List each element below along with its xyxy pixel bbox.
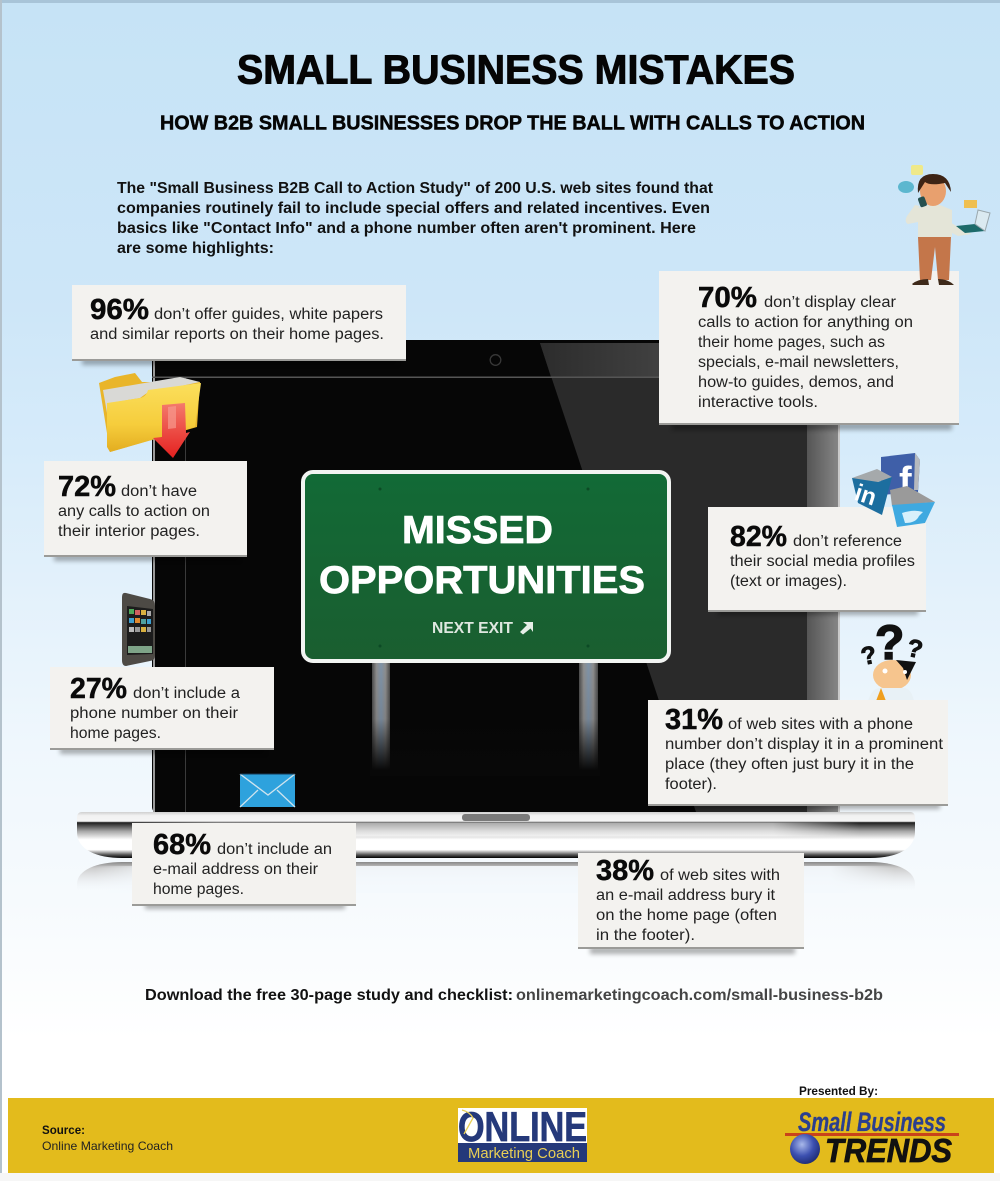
- description: don’t reference: [793, 533, 902, 550]
- question marks: [858, 617, 925, 671]
- description: and similar reports on their home pages.: [90, 326, 384, 343]
- logo: small business trends: TRENDS: [825, 1132, 952, 1169]
- subtitle: HOW B2B SMALL BUSINESSES DROP THE BALL WITH CALLS TO ACTION: [160, 112, 865, 134]
- card: 68%: [132, 823, 356, 909]
- icon: folder with download arrow: [99, 373, 201, 458]
- card: 38%: [578, 853, 804, 954]
- card: 82%: [708, 507, 926, 615]
- description: an e-mail address bury it: [596, 887, 776, 904]
- stat: 68%: [153, 829, 211, 861]
- description: their social media profiles: [730, 553, 915, 570]
- card: 31%: [648, 700, 948, 809]
- description: place (they often just bury it in the: [665, 756, 914, 773]
- trousers: [918, 237, 951, 280]
- description: of web sites with: [660, 867, 780, 884]
- logo: online marketing coach: [458, 1103, 587, 1162]
- description: [153, 841, 332, 898]
- source: Online Marketing Coach: [42, 1139, 173, 1153]
- stat: 70%: [698, 282, 757, 314]
- twitter cube: [890, 486, 935, 527]
- description: don’t have: [121, 483, 197, 500]
- intro paragraph: basics like "Contact Info" and a phone number often aren't prominent. Here: [117, 220, 696, 237]
- download line: [145, 987, 883, 1004]
- description: [90, 306, 384, 343]
- intro paragraph: are some highlights:: [117, 240, 274, 257]
- description: on the home page (often: [596, 907, 777, 924]
- description: [596, 867, 780, 944]
- icon: smartphone: [122, 593, 155, 666]
- question marks: ?: [858, 641, 879, 671]
- phone: [917, 196, 927, 208]
- head: [920, 176, 946, 206]
- description: phone number on their: [70, 705, 238, 722]
- description: don’t include a: [133, 685, 240, 702]
- description: their interior pages.: [58, 523, 200, 540]
- presented by label: Presented By:: [799, 1086, 878, 1098]
- description: [698, 294, 913, 411]
- logo: online marketing coach: ONLINE: [458, 1103, 587, 1150]
- source: [42, 1123, 173, 1153]
- sign posts: [370, 662, 600, 776]
- description: their home pages, such as: [698, 334, 885, 351]
- laptop screen: [152, 340, 840, 813]
- question marks: ?: [904, 634, 925, 664]
- logo: online marketing coach: Marketing Coach: [468, 1145, 580, 1162]
- laptop: [77, 340, 915, 893]
- description: home pages.: [70, 725, 161, 742]
- description: don’t include an: [217, 841, 332, 858]
- intro paragraph: companies routinely fail to include special offers and related incentives. Even: [117, 200, 710, 217]
- shirt and arms: [906, 205, 952, 237]
- icon: confused man with question marks: [858, 617, 925, 701]
- description: interactive tools.: [698, 394, 818, 411]
- card: 96%: [72, 285, 406, 365]
- icon: exit arrow: [520, 622, 533, 634]
- sign text: opportunities: OPPORTUNITIES: [319, 559, 645, 602]
- description: e-mail address on their: [153, 861, 318, 878]
- source: Source:: [42, 1123, 85, 1137]
- stat: 96%: [90, 294, 149, 326]
- description: home pages.: [153, 881, 244, 898]
- road sign: [303, 472, 669, 776]
- laptop: [956, 224, 985, 233]
- description: how-to guides, demos, and: [698, 374, 894, 391]
- icon: social media cubes: [851, 453, 935, 527]
- description: number don’t display it in a prominent: [665, 736, 944, 753]
- description: [70, 685, 240, 742]
- icon: businessman on phone with laptop: [898, 165, 990, 285]
- stat: 82%: [730, 521, 787, 553]
- card: 70%: [659, 271, 959, 430]
- footer band: [8, 1098, 994, 1173]
- description: [58, 483, 210, 540]
- question marks: ?: [875, 617, 904, 670]
- download line: onlinemarketingcoach.com/small-business-b2b: [516, 987, 883, 1004]
- description: in the footer).: [596, 927, 695, 944]
- logo: small business trends: Small Business: [798, 1107, 946, 1137]
- description: [730, 533, 915, 590]
- description: of web sites with a phone: [728, 716, 913, 733]
- laptop base: [77, 812, 915, 858]
- linkedin cube: in: [851, 479, 880, 512]
- intro paragraph: [117, 180, 713, 257]
- logo: small business trends: [785, 1107, 959, 1169]
- description: [665, 716, 944, 793]
- description: don’t display clear: [764, 294, 896, 311]
- title: SMALL BUSINESS MISTAKES: [237, 46, 795, 92]
- speech bubbles: [898, 165, 977, 208]
- card: 27%: [50, 667, 274, 754]
- sign text: next exit: NEXT EXIT: [432, 620, 514, 637]
- intro paragraph: The "Small Business B2B Call to Action Study" of 200 U.S. web sites found that: [117, 180, 713, 197]
- download line: Download the free 30-page study and checklist:: [145, 987, 513, 1004]
- sign board: [303, 472, 669, 661]
- stat: 38%: [596, 855, 654, 887]
- icon: envelope: [240, 774, 295, 807]
- description: (text or images).: [730, 573, 847, 590]
- description: specials, e-mail newsletters,: [698, 354, 899, 371]
- description: don’t offer guides, white papers: [154, 306, 383, 323]
- stat: 27%: [70, 673, 127, 705]
- card: 72%: [44, 461, 247, 561]
- description: calls to action for anything on: [698, 314, 913, 331]
- description: footer).: [665, 776, 717, 793]
- facebook cube: f: [899, 460, 912, 502]
- sign text: missed: MISSED: [402, 509, 553, 552]
- stat: 72%: [58, 471, 116, 503]
- stat: 31%: [665, 704, 723, 736]
- laptop reflection: [77, 862, 915, 893]
- description: any calls to action on: [58, 503, 210, 520]
